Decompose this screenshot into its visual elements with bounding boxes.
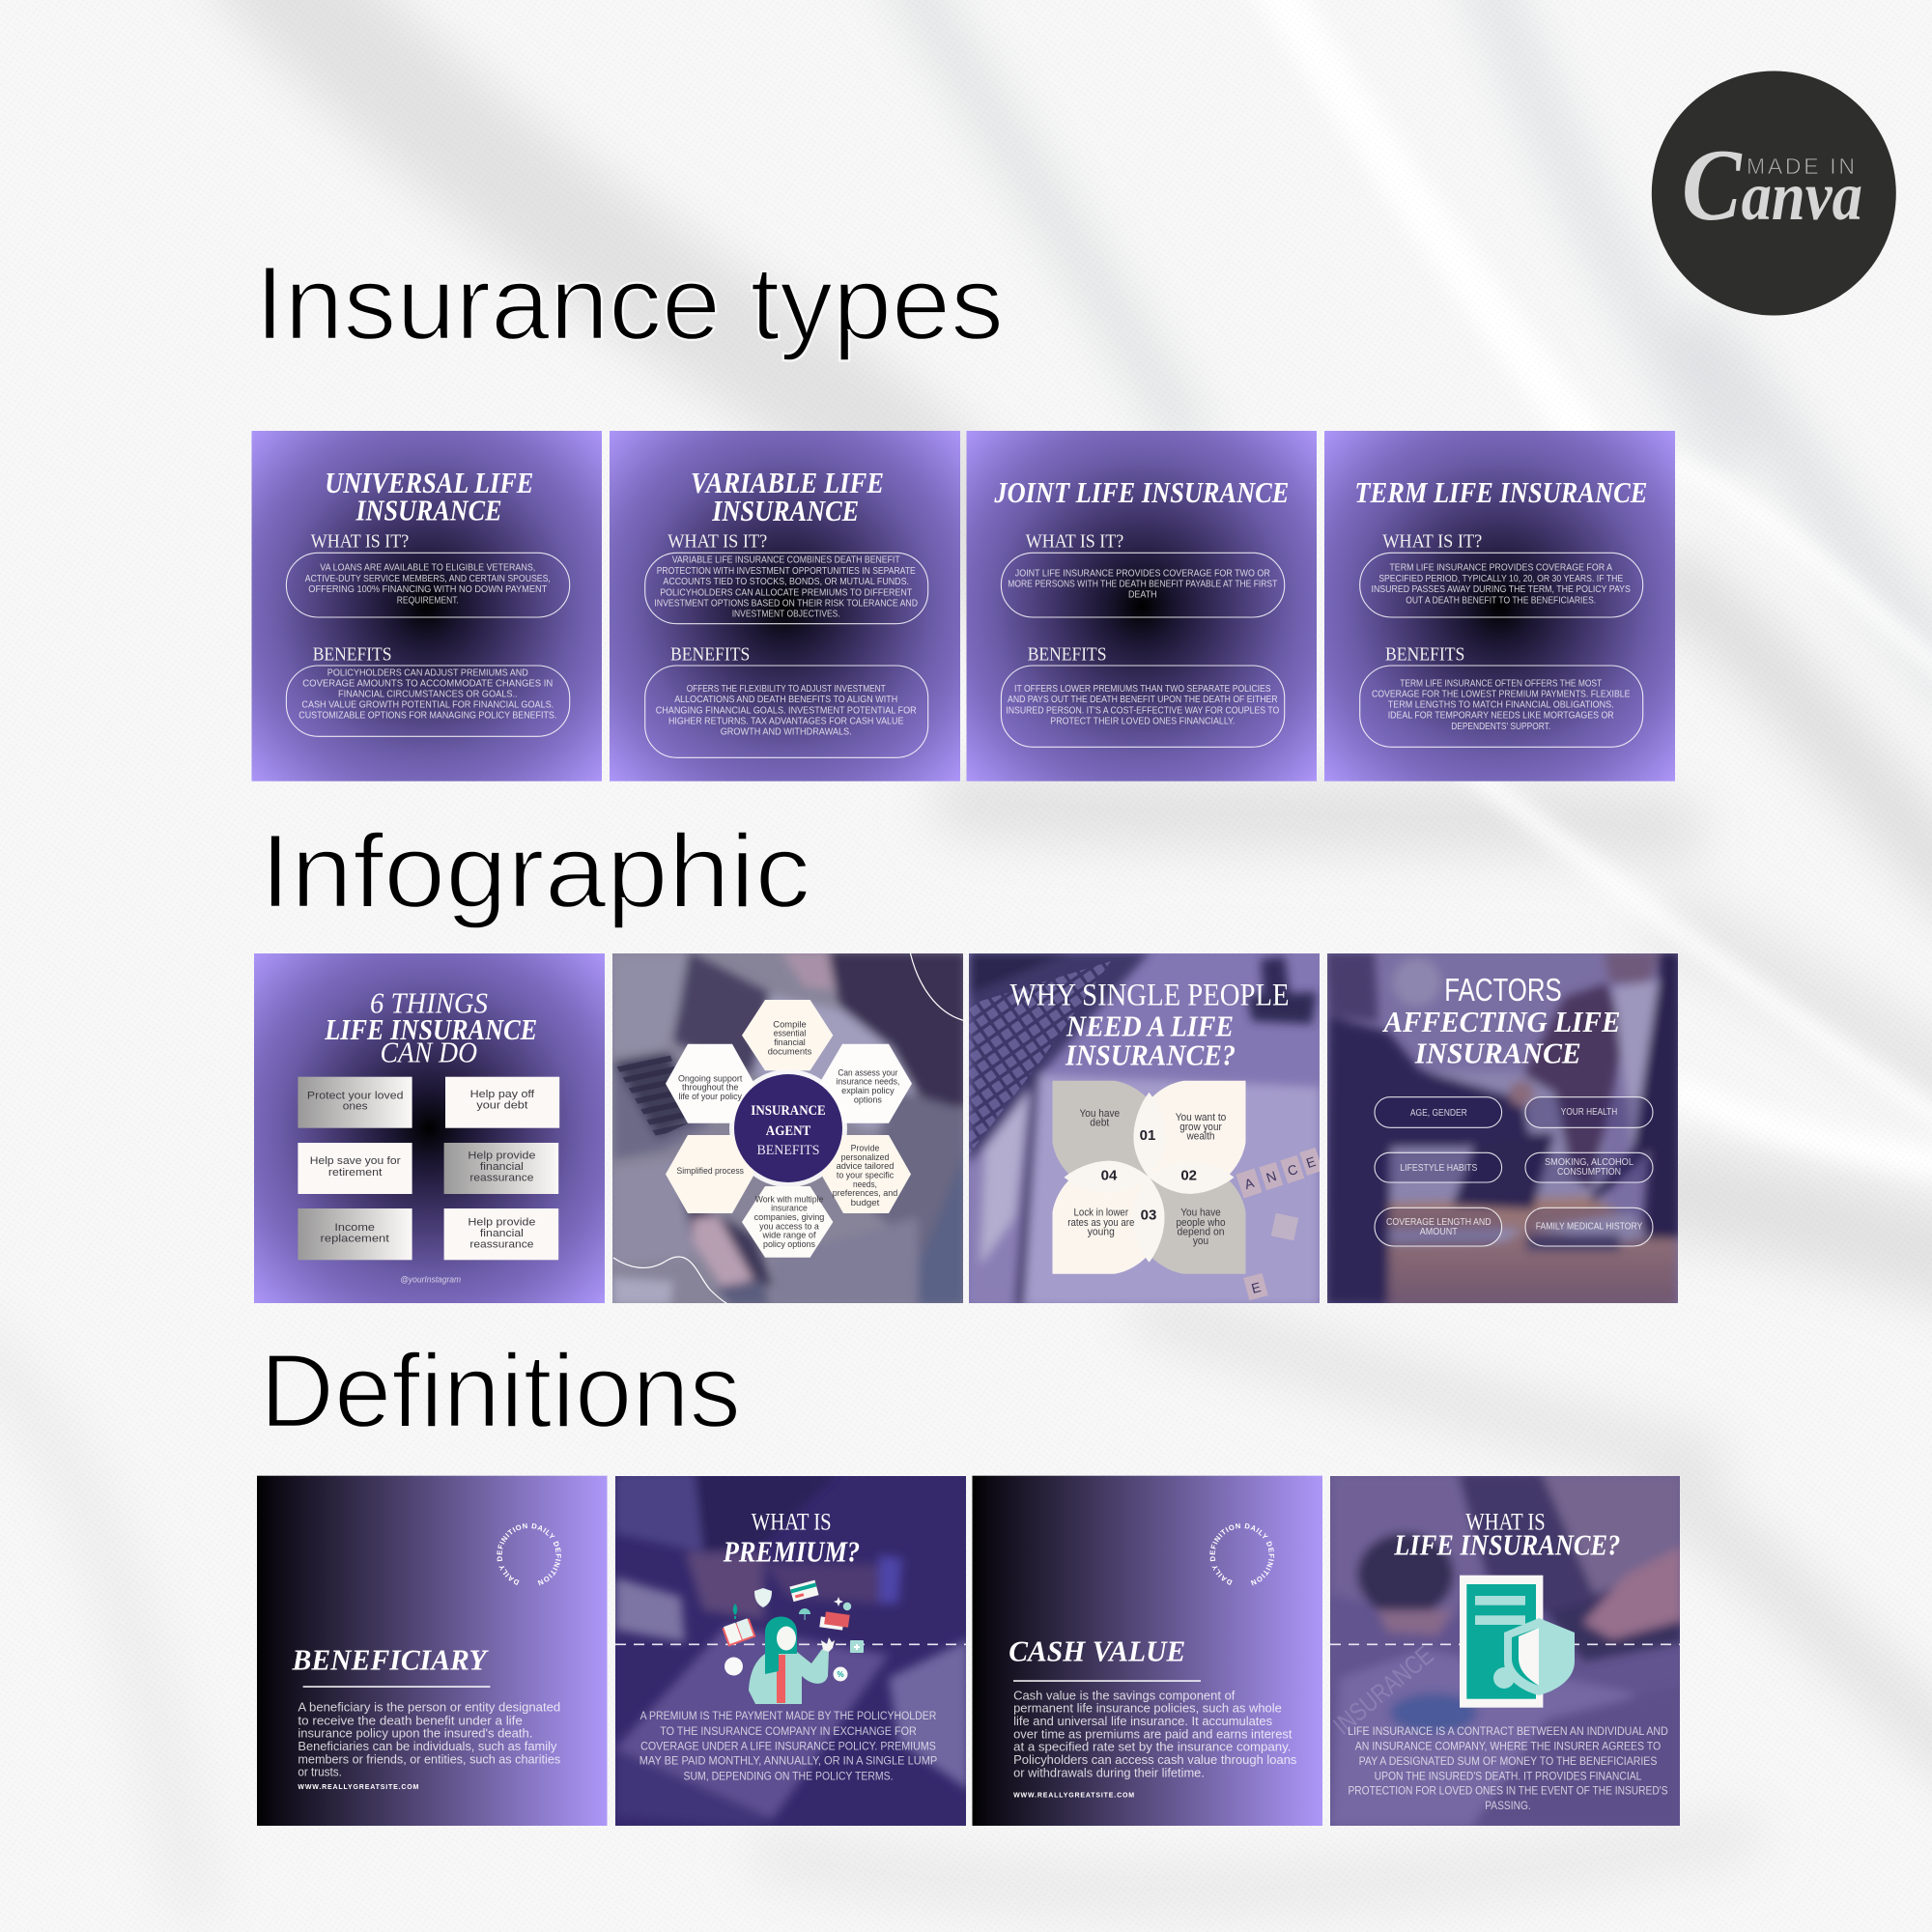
- card: 6 things life insurance can do: Help provide: [468, 1216, 535, 1228]
- card: what is life insurance: WHAT IS: [1465, 1509, 1546, 1535]
- card: factors affecting life insurance: AFFECTING LIFE: [1382, 1005, 1621, 1038]
- card: insurance agent benefits: [612, 952, 966, 1306]
- card: insurance agent benefits: insurance needs,: [836, 1077, 899, 1087]
- card: factors affecting life insurance: LIFESTYLE HABITS: [1400, 1162, 1477, 1174]
- card: variable life insurance: POLICYHOLDERS CAN ALLOCATE PREMIUMS TO DIFFERENT: [660, 586, 913, 598]
- card: why single people need life insurance: NEED A LIFE: [1065, 1009, 1234, 1043]
- card: factors affecting life insurance: AMOUNT: [1420, 1226, 1458, 1237]
- card: what is life insurance: PAY A DESIGNATED SUM OF MONEY TO THE BENEFICIARIES: [1359, 1754, 1657, 1768]
- card: insurance agent benefits: Provide: [851, 1144, 879, 1153]
- card: 6 things life insurance can do: CAN DO: [381, 1035, 477, 1068]
- card: beneficiary definition: WWW.REALLYGREATSITE.COM: [298, 1784, 419, 1791]
- card: why single people need life insurance: people who: [1177, 1217, 1225, 1229]
- card: universal life insurance: WHAT IS IT?: [311, 531, 409, 553]
- card: variable life insurance: HIGHER RETURNS. TAX ADVANTAGES FOR CASH VALUE: [668, 715, 903, 726]
- card: cash value definition: permanent life insurance policies, such as whole: [1013, 1702, 1282, 1716]
- card: why single people need life insurance: 03: [1141, 1207, 1156, 1223]
- card: factors affecting life insurance: CONSUMPTION: [1557, 1166, 1621, 1178]
- card: why single people need life insurance: [969, 952, 1322, 1306]
- card: insurance agent benefits: financial: [774, 1037, 806, 1047]
- badge: made in Canva: [1652, 71, 1896, 315]
- card: insurance agent benefits: companies, giving: [754, 1212, 824, 1222]
- card: insurance agent benefits: Simplified process: [676, 1166, 744, 1176]
- card: variable life insurance: GROWTH AND WITHDRAWALS.: [721, 725, 852, 737]
- card: 6 things life insurance can do: your debt: [476, 1099, 527, 1111]
- card: joint life insurance: AND PAYS OUT THE DEATH BENEFIT UPON THE DEATH OF EITHER: [1008, 694, 1278, 705]
- card: what is life insurance: INSURANCE: [1328, 1640, 1439, 1741]
- card: insurance agent benefits: insurance: [771, 1204, 808, 1213]
- card: term life insurance: OUT A DEATH BENEFIT TO THE BENEFICIARIES.: [1406, 594, 1596, 606]
- card: beneficiary definition: to receive the death benefit under a life: [298, 1714, 523, 1727]
- card: universal life insurance: UNIVERSAL LIFE: [325, 466, 533, 499]
- card: joint life insurance: IT OFFERS LOWER PREMIUMS THAN TWO SEPARATE POLICIES: [1014, 683, 1271, 695]
- card: what is life insurance: LIFE INSURANCE IS A CONTRACT BETWEEN AN INDIVIDUAL AND: [1348, 1724, 1668, 1738]
- card: why single people need life insurance: 01: [1140, 1127, 1155, 1144]
- card: variable life insurance: INSURANCE: [711, 494, 859, 527]
- card: why single people need life insurance: INSURANCE?: [1065, 1038, 1236, 1072]
- card: cash value definition: DAILY DEFINITION DAILY DEFINITION: [1209, 1522, 1274, 1586]
- card: what is premium: WHAT IS: [752, 1509, 832, 1535]
- card: insurance agent benefits: personalized: [841, 1152, 889, 1162]
- card: cash value definition: or withdrawals during their lifetime.: [1013, 1766, 1205, 1779]
- card: term life insurance: WHAT IS IT?: [1382, 531, 1482, 553]
- card: term life insurance: DEPENDENTS' SUPPORT.: [1451, 721, 1550, 732]
- card: why single people need life insurance: N: [1264, 1168, 1278, 1185]
- card: insurance agent benefits: advice tailored: [837, 1161, 894, 1171]
- card: joint life insurance: WHAT IS IT?: [1026, 531, 1123, 553]
- card: universal life insurance: VA LOANS ARE AVAILABLE TO ELIGIBLE VETERANS,: [320, 562, 535, 574]
- card: joint life insurance: [966, 431, 1317, 781]
- card: term life insurance: TERM LIFE INSURANCE: [1354, 475, 1647, 509]
- card: factors affecting life insurance: YOUR HEALTH: [1561, 1106, 1617, 1118]
- card: term life insurance: TERM LIFE INSURANCE OFTEN OFFERS THE MOST: [1400, 677, 1603, 689]
- card: why single people need life insurance: 04: [1101, 1167, 1118, 1183]
- card: variable life insurance: INVESTMENT OBJECTIVES.: [732, 608, 840, 619]
- card: beneficiary definition: Beneficiaries can be individuals, such as family: [298, 1740, 557, 1753]
- card: factors affecting life insurance: AGE, GENDER: [1410, 1107, 1467, 1119]
- card: insurance agent benefits: essential: [774, 1029, 806, 1038]
- card: joint life insurance: BENEFITS: [1028, 643, 1107, 665]
- card: why single people need life insurance: debt: [1090, 1118, 1109, 1129]
- card: why single people need life insurance: you: [1193, 1236, 1208, 1247]
- card: insurance agent benefits: needs,: [853, 1179, 877, 1189]
- card: variable life insurance: CHANGING FINANCIAL GOALS. INVESTMENT POTENTIAL FOR: [656, 704, 917, 716]
- card: beneficiary definition: or trusts.: [298, 1766, 342, 1779]
- card: why single people need life insurance: young: [1088, 1227, 1115, 1238]
- badge: made in Canva: MADE IN: [1747, 154, 1855, 179]
- card: cash value definition: [972, 1476, 1322, 1826]
- card: variable life insurance: [610, 431, 960, 781]
- card: insurance agent benefits: Compile: [773, 1019, 807, 1029]
- card: why single people need life insurance: 02: [1180, 1167, 1197, 1183]
- icon: insurance document with shield: [1460, 1576, 1575, 1708]
- heading: Definitions: Definitions: [260, 1332, 741, 1450]
- card: beneficiary definition: BENEFICIARY: [292, 1642, 489, 1676]
- card: insurance agent benefits: preferences, and: [833, 1188, 897, 1198]
- card: beneficiary definition: A beneficiary is the person or entity designated: [298, 1701, 560, 1715]
- card: 6 things life insurance can do: @yourInstagram: [400, 1274, 461, 1285]
- card: cash value definition: CASH VALUE: [1009, 1634, 1185, 1667]
- card: variable life insurance: OFFERS THE FLEXIBILITY TO ADJUST INVESTMENT: [687, 683, 886, 695]
- card: why single people need life insurance: You want to: [1176, 1112, 1226, 1123]
- card: insurance agent benefits: to your specific: [837, 1171, 894, 1180]
- card: cash value definition: life and universal life insurance. It accumulates: [1013, 1715, 1272, 1728]
- card: universal life insurance: COVERAGE AMOUNTS TO ACCOMMODATE CHANGES IN: [302, 677, 553, 689]
- card: what is premium: TO THE INSURANCE COMPANY IN EXCHANGE FOR: [660, 1724, 917, 1738]
- card: joint life insurance: JOINT LIFE INSURANCE: [994, 475, 1289, 509]
- card: 6 things life insurance can do: Help provide: [468, 1150, 535, 1161]
- card: universal life insurance: CUSTOMIZABLE OPTIONS FOR MANAGING POLICY BENEFITS.: [298, 710, 556, 722]
- card: variable life insurance: WHAT IS IT?: [668, 531, 767, 553]
- card: insurance agent benefits: Can assess your: [838, 1067, 897, 1077]
- card: why single people need life insurance: You have: [1180, 1208, 1221, 1219]
- card: why single people need life insurance: WHY SINGLE PEOPLE: [1010, 979, 1289, 1013]
- card: factors affecting life insurance: FAMILY MEDICAL HISTORY: [1536, 1221, 1642, 1233]
- card: insurance agent benefits: options: [854, 1094, 882, 1104]
- card: factors affecting life insurance: FACTORS: [1444, 972, 1562, 1008]
- card: insurance agent benefits: throughout the: [682, 1083, 738, 1093]
- card: variable life insurance: ACCOUNTS TIED TO STOCKS, BONDS, OR MUTUAL FUNDS.: [663, 576, 909, 587]
- card: why single people need life insurance: E: [1250, 1279, 1263, 1296]
- card: why single people need life insurance: rates as you are: [1067, 1217, 1134, 1229]
- card: insurance agent benefits: AGENT: [766, 1123, 810, 1139]
- card: variable life insurance: VARIABLE LIFE INSURANCE COMBINES DEATH BENEFIT: [672, 554, 900, 566]
- card: term life insurance: COVERAGE FOR THE LOWEST PREMIUM PAYMENTS. FLEXIBLE: [1372, 688, 1630, 699]
- card: 6 things life insurance can do: [254, 953, 605, 1303]
- card: what is life insurance: AN INSURANCE COMPANY, WHERE THE INSURER AGREES TO: [1355, 1739, 1661, 1752]
- card: what is premium: A PREMIUM IS THE PAYMENT MADE BY THE POLICYHOLDER: [640, 1709, 937, 1722]
- card: cash value definition: Policyholders can access cash value through loans: [1013, 1753, 1296, 1767]
- card: universal life insurance: FINANCIAL CIRCUMSTANCES OR GOALS..: [338, 689, 518, 700]
- card: variable life insurance: PROTECTION WITH INVESTMENT OPPORTUNITIES IN SEPARATE: [657, 565, 916, 577]
- card: universal life insurance: CASH VALUE GROWTH POTENTIAL FOR FINANCIAL GOALS.: [301, 699, 554, 711]
- card: beneficiary definition: [257, 1476, 607, 1826]
- card: what is life insurance: UPON THE INSURED'S DEATH. IT PROVIDES FINANCIAL: [1375, 1769, 1642, 1782]
- card: insurance agent benefits: INSURANCE: [751, 1103, 826, 1119]
- card: universal life insurance: OFFERING 100% FINANCING WITH NO DOWN PAYMENT: [308, 583, 548, 595]
- card: term life insurance: INSURED PASSES AWAY DURING THE TERM, THE POLICY PAYS: [1372, 583, 1631, 595]
- card: why single people need life insurance: depend on: [1177, 1227, 1225, 1238]
- card: beneficiary definition: members or friends, or entities, such as charities: [298, 1752, 560, 1766]
- card: insurance agent benefits: budget: [851, 1198, 880, 1208]
- card: 6 things life insurance can do: reassurance: [469, 1239, 533, 1251]
- card: joint life insurance: MORE PERSONS WITH THE DEATH BENEFIT PAYABLE AT THE FIRST: [1008, 579, 1278, 590]
- card: 6 things life insurance can do: Protect your loved: [307, 1090, 403, 1101]
- card: joint life insurance: JOINT LIFE INSURANCE PROVIDES COVERAGE FOR TWO OR: [1015, 567, 1270, 579]
- card: term life insurance: TERM LIFE INSURANCE PROVIDES COVERAGE FOR A: [1389, 562, 1612, 574]
- card: term life insurance: IDEAL FOR TEMPORARY NEEDS LIKE MORTGAGES OR: [1388, 710, 1614, 722]
- card: 6 things life insurance can do: retirement: [328, 1167, 382, 1179]
- card: 6 things life insurance can do: financial: [480, 1228, 524, 1239]
- card: term life insurance: SPECIFIED PERIOD, TYPICALLY 10, 20, OR 30 YEARS. IF THE: [1378, 573, 1623, 584]
- card: 6 things life insurance can do: ones: [343, 1101, 368, 1113]
- card: 6 things life insurance can do: Help save you for: [310, 1155, 401, 1167]
- card: what is life insurance: PROTECTION FOR LOVED ONES IN THE EVENT OF THE INSURED'S: [1349, 1784, 1667, 1798]
- card: universal life insurance: ACTIVE-DUTY SERVICE MEMBERS, AND CERTAIN SPOUSES,: [305, 573, 551, 584]
- card: insurance agent benefits: explain policy: [841, 1086, 895, 1095]
- card: universal life insurance: POLICYHOLDERS CAN ADJUST PREMIUMS AND: [327, 667, 528, 678]
- card: cash value definition: over time as premiums are paid and earns interest: [1013, 1727, 1293, 1741]
- card: factors affecting life insurance: INSURANCE: [1414, 1037, 1581, 1070]
- card: why single people need life insurance: A: [1242, 1175, 1257, 1192]
- heading: Infographic: Infographic: [260, 812, 810, 930]
- card: universal life insurance: REQUIREMENT.: [397, 594, 459, 606]
- card: insurance agent benefits: wide range of: [762, 1231, 816, 1240]
- card: universal life insurance: INSURANCE: [355, 494, 502, 527]
- card: universal life insurance: [251, 431, 602, 781]
- card: why single people need life insurance: C: [1286, 1161, 1299, 1179]
- card: term life insurance: TERM LENGTHS TO MATCH FINANCIAL OBLIGATIONS.: [1388, 699, 1614, 711]
- card: insurance agent benefits: Ongoing support: [678, 1073, 743, 1083]
- card: what is premium: COVERAGE UNDER A LIFE INSURANCE POLICY. PREMIUMS: [640, 1739, 936, 1752]
- card: cash value definition: WWW.REALLYGREATSITE.COM: [1013, 1793, 1134, 1800]
- card: insurance agent benefits: Work with multiple: [755, 1194, 823, 1204]
- card: term life insurance: BENEFITS: [1385, 643, 1464, 665]
- card: why single people need life insurance: wealth: [1186, 1131, 1215, 1143]
- card: insurance agent benefits: life of your policy: [678, 1092, 742, 1101]
- card: joint life insurance: DEATH: [1128, 589, 1157, 601]
- illustration: woman with finance icons: %: [837, 1670, 844, 1679]
- card: term life insurance: [1324, 431, 1675, 781]
- card: beneficiary definition: insurance policy upon the insured's death.: [298, 1727, 532, 1741]
- heading: Insurance types: Insurance types: [255, 244, 1004, 362]
- card: insurance agent benefits: you access to a: [759, 1221, 820, 1231]
- card: cash value definition: Cash value is the savings component of: [1013, 1689, 1236, 1702]
- badge: made in Canva: Canva: [1682, 128, 1862, 242]
- card: insurance agent benefits: policy options: [763, 1239, 815, 1249]
- card: why single people need life insurance: You have: [1080, 1108, 1120, 1120]
- card: what is life insurance: PASSING.: [1485, 1799, 1531, 1812]
- card: joint life insurance: INSURED PERSON. IT'S A COST-EFFECTIVE WAY FOR COUPLES TO: [1006, 704, 1279, 716]
- card: variable life insurance: VARIABLE LIFE: [691, 466, 884, 499]
- card: why single people need life insurance: Lock in lower: [1074, 1208, 1128, 1219]
- card: what is life insurance: LIFE INSURANCE?: [1393, 1527, 1620, 1561]
- card: universal life insurance: BENEFITS: [313, 643, 392, 665]
- card: insurance agent benefits: BENEFITS: [757, 1143, 819, 1158]
- card: factors affecting life insurance: SMOKING, ALCOHOL: [1545, 1156, 1634, 1168]
- card: why single people need life insurance: grow your: [1179, 1122, 1222, 1133]
- card: what is life insurance: [1328, 1473, 1683, 1828]
- card: factors affecting life insurance: [1325, 952, 1681, 1306]
- card: 6 things life insurance can do: replacement: [321, 1234, 389, 1245]
- card: 6 things life insurance can do: LIFE INSURANCE: [324, 1012, 537, 1046]
- card: cash value definition: at a specified rate set by the insurance company.: [1013, 1741, 1291, 1754]
- card: what is premium: PREMIUM?: [723, 1535, 860, 1569]
- card: joint life insurance: PROTECT THEIR LOVED ONES FINANCIALLY.: [1050, 715, 1235, 726]
- card: variable life insurance: BENEFITS: [670, 643, 750, 665]
- card: 6 things life insurance can do: Help pay off: [470, 1089, 535, 1100]
- card: what is premium: [615, 1473, 969, 1828]
- card: 6 things life insurance can do: Income: [334, 1222, 375, 1234]
- illustration: woman with finance icons: [722, 1580, 864, 1704]
- card: 6 things life insurance can do: reassurance: [469, 1173, 533, 1184]
- card: why single people need life insurance: E: [1304, 1153, 1318, 1171]
- card: insurance agent benefits: documents: [768, 1047, 812, 1057]
- card: variable life insurance: ALLOCATIONS AND DEATH BENEFITS TO ALIGN WITH: [674, 694, 897, 705]
- card: beneficiary definition: DAILY DEFINITION DAILY DEFINITION: [497, 1522, 561, 1586]
- card: variable life insurance: INVESTMENT OPTIONS BASED ON THEIR RISK TOLERANCE AND: [654, 597, 918, 609]
- card: what is premium: MAY BE PAID MONTHLY, ANNUALLY, OR IN A SINGLE LUMP: [639, 1754, 937, 1768]
- card: factors affecting life insurance: COVERAGE LENGTH AND: [1386, 1216, 1492, 1228]
- card: 6 things life insurance can do: 6 THINGS: [370, 985, 488, 1019]
- card: 6 things life insurance can do: financial: [480, 1161, 524, 1173]
- card: what is premium: SUM, DEPENDING ON THE POLICY TERMS.: [684, 1769, 893, 1782]
